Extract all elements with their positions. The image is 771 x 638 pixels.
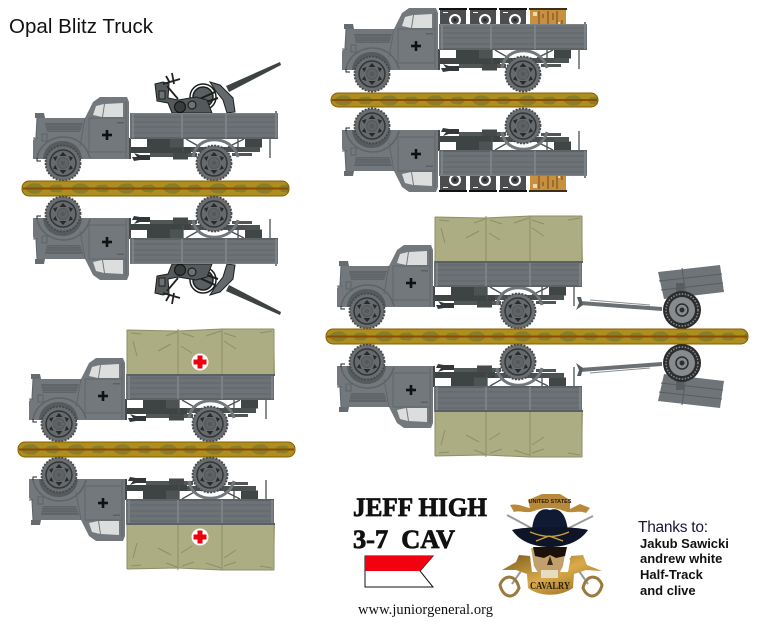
title: Opal Blitz Truck bbox=[9, 15, 154, 38]
towed anti-tank gun: mirrored bbox=[576, 344, 724, 408]
truck with flak gun: mirrored bbox=[33, 196, 281, 315]
wooden plank: flak truck fold bbox=[22, 181, 289, 196]
unit name: 3-7 CAV bbox=[353, 525, 455, 554]
credits list: Half-Track bbox=[640, 567, 704, 582]
cargo: barrels and crate mirrored bbox=[439, 173, 567, 192]
cavalry guidon flag bbox=[365, 556, 433, 587]
website url: www.juniorgeneral.org bbox=[358, 602, 493, 618]
thanks heading: Thanks to: bbox=[638, 519, 708, 536]
credits list: Jakub Sawicki bbox=[640, 536, 729, 551]
truck with flak gun: top bbox=[33, 62, 281, 180]
truck with barrels and crate: top bbox=[342, 8, 587, 92]
red cross emblem bbox=[192, 354, 208, 370]
ambulance truck: top bbox=[29, 329, 275, 442]
covered truck with towed gun: top bbox=[337, 216, 583, 328]
wooden plank: cargo truck fold bbox=[331, 93, 598, 107]
cavalry skull emblem: CAVALRY bbox=[530, 581, 571, 592]
red cross emblem: mirrored bbox=[192, 528, 208, 546]
truck with barrels and crate: mirrored bbox=[342, 108, 587, 192]
wooden plank: ambulance fold bbox=[18, 442, 295, 457]
cavalry skull emblem: UNITED STATES bbox=[529, 499, 572, 505]
author name: JEFF HIGH bbox=[353, 493, 487, 522]
covered truck with towed gun: mirrored bbox=[337, 344, 583, 457]
cargo: barrels and crate bbox=[439, 8, 567, 27]
credits list: andrew white bbox=[640, 551, 722, 566]
credits list: and clive bbox=[640, 583, 696, 598]
ambulance truck: mirrored bbox=[29, 458, 275, 570]
wooden plank: towed gun fold bbox=[326, 329, 748, 344]
towed anti-tank gun bbox=[576, 265, 724, 329]
cavalry skull emblem bbox=[500, 494, 602, 596]
credits list bbox=[640, 536, 729, 598]
